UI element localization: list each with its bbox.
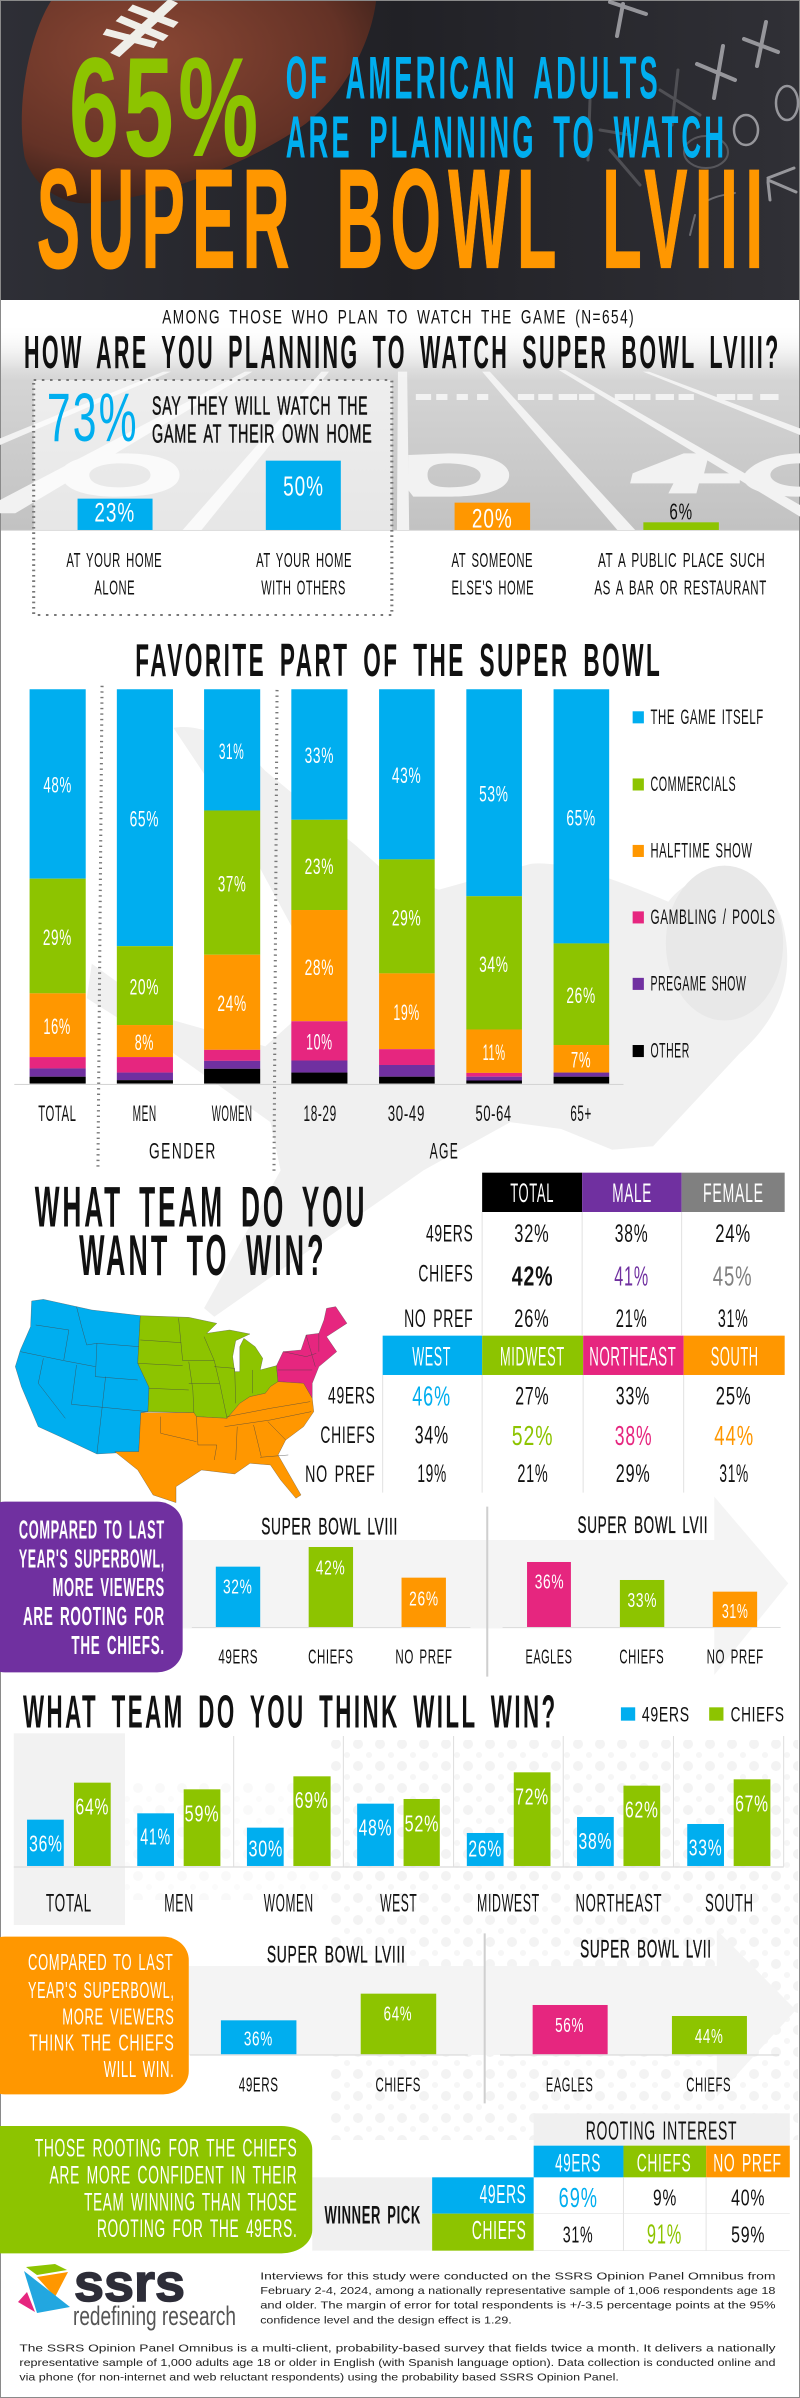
- field photo backdrop: [0, 323, 800, 531]
- table: regions: 34%: [415, 1420, 449, 1449]
- table: total male female: TOTAL: [510, 1179, 554, 1208]
- panel description text: [19, 2342, 776, 2383]
- chart: winner pick by group: 48%: [359, 1816, 392, 1841]
- section: rooting comparison: MORE VIEWERS: [53, 1574, 165, 1602]
- chart: winner pick by group: [14, 1772, 784, 1868]
- map: US regions: [15, 1299, 347, 1503]
- table: total male female: 41%: [614, 1260, 649, 1292]
- divider: [483, 1933, 487, 2103]
- table: total male female: 38%: [615, 1219, 648, 1247]
- logo: SSRS: ssrs: [74, 2254, 185, 2313]
- table: rooting interest vs winner pick: 49ERS: [555, 2148, 601, 2177]
- section: winner comparison: WILL WIN.: [104, 2057, 174, 2082]
- stacked bar: total: 16%: [43, 1014, 71, 1039]
- stacked bar: men: 8%: [135, 1030, 154, 1055]
- legend: [621, 1702, 785, 1726]
- table: regions: NO PREF: [305, 1460, 376, 1487]
- section: rooting versus winner pick: TEAM WINNING THAN THOSE: [84, 2187, 297, 2216]
- chart: winner pick by group: 30%: [248, 1837, 283, 1862]
- panel description text: via phone (for non-internet and web reluctant respondents) using the probability based SSRS Opinion Panel.: [19, 2371, 619, 2383]
- logo: SSRS: [18, 2254, 236, 2331]
- background: football player silhouette: [87, 727, 787, 1317]
- chart: winner pick by group: 69%: [295, 1788, 329, 1813]
- stacked bar: women: 24%: [217, 991, 247, 1016]
- table: regions: CHIEFS: [320, 1421, 376, 1448]
- section: how viewers plan to watch: WITH OTHERS: [261, 576, 346, 599]
- table: total male female: [404, 1173, 785, 1335]
- bar: at your home with others: 50%: [283, 470, 324, 502]
- chart: Super Bowl LVIII prediction: [190, 1941, 468, 2096]
- table: regions: 29%: [616, 1459, 651, 1487]
- chart: winner pick by group: 41%: [140, 1825, 171, 1850]
- stacked bar: age 18-29: 10%: [306, 1030, 333, 1054]
- stacked bar: women: 37%: [218, 872, 246, 896]
- chart: Super Bowl LVIII rooting: SUPER BOWL LVIII: [261, 1513, 398, 1540]
- section: rooting comparison: COMPARED TO LAST: [19, 1516, 165, 1545]
- stacked bar: women: [204, 689, 260, 1084]
- table: total male female: 49ERS: [426, 1220, 473, 1247]
- background dot texture lower left: [40, 1780, 340, 1900]
- table: regions: 33%: [616, 1381, 650, 1410]
- table: regions: 38%: [615, 1419, 653, 1451]
- bar category labels: TOTAL: [38, 1101, 77, 1126]
- table: total male female: 26%: [514, 1304, 549, 1332]
- stacked bar: men: [117, 689, 173, 1084]
- callout: more confident: [0, 2126, 312, 2253]
- total column shading: [14, 1733, 125, 1925]
- table: rooting interest vs winner pick: CHIEFS: [472, 2217, 527, 2245]
- section: rooting versus winner pick: [0, 2113, 790, 2383]
- bar category labels: WOMEN: [212, 1101, 253, 1126]
- section: how viewers plan to watch: [0, 306, 800, 615]
- section: favorite part of the Super Bowl: GENDER: [149, 1139, 217, 1163]
- table: total male female: 24%: [715, 1219, 751, 1247]
- section: how viewers plan to watch: AT SOMEONE: [452, 548, 533, 572]
- bar category labels: 30-49: [388, 1101, 425, 1126]
- stacked bar: age 18-29: 23%: [305, 854, 334, 879]
- table: regions: WEST: [412, 1342, 451, 1372]
- chart: Super Bowl LVII rooting: EAGLES: [526, 1645, 572, 1668]
- table: rooting interest vs winner pick: [312, 2113, 790, 2251]
- table: total male female: CHIEFS: [418, 1260, 473, 1287]
- bar: at someone else's home: 20%: [472, 504, 513, 533]
- table: total male female: 42%: [512, 1260, 554, 1292]
- chart category labels: [46, 1888, 754, 1917]
- stacked bar: age 65+: 26%: [566, 983, 596, 1008]
- chart category labels: MEN: [164, 1888, 194, 1917]
- chart: Super Bowl LVIII rooting: 49ERS: [218, 1645, 258, 1668]
- table: regions: 25%: [716, 1381, 752, 1410]
- stacked bar: age 50-64: 34%: [479, 952, 509, 977]
- table: total male female: 31%: [718, 1304, 748, 1332]
- chart: Super Bowl LVII prediction: [500, 1935, 779, 2096]
- chart: Super Bowl LVII prediction: 44%: [695, 2026, 723, 2048]
- stacked bar: total: [30, 689, 86, 1084]
- section: favorite part of the Super Bowl: [14, 635, 776, 1172]
- section: rooting versus winner pick: THOSE ROOTING FOR THE CHIEFS: [35, 2133, 297, 2162]
- bar: at your home alone: 23%: [94, 498, 135, 528]
- chart: Super Bowl LVII rooting: CHIEFS: [619, 1645, 664, 1668]
- header banner: 65%: [69, 28, 263, 186]
- header banner: [1, 1, 799, 300]
- chart axis and group dividers: [14, 686, 623, 1172]
- section: rooting comparison: NO PREF: [395, 1645, 453, 1668]
- table: rooting interest vs winner pick: 9%: [653, 2186, 677, 2211]
- bar: at a public place: [594, 500, 767, 599]
- heading: [35, 1175, 367, 1287]
- stacked bar: age 50-64: [466, 689, 522, 1084]
- bar category labels: [38, 1101, 592, 1126]
- stacked bar: men: 65%: [130, 807, 159, 831]
- background arrow: [189, 1930, 796, 2097]
- chart: Super Bowl LVIII rooting: CHIEFS: [308, 1645, 354, 1668]
- methodology text: confidence level and the design effect is 1.29.: [260, 2314, 512, 2326]
- callout: 73% at own home: 73%: [47, 379, 139, 456]
- bar: at someone else's home: [452, 503, 534, 599]
- background arrow: [183, 1497, 788, 1675]
- chart: Super Bowl LVII rooting: 31%: [722, 1601, 748, 1623]
- chart: Super Bowl LVIII rooting: [192, 1513, 470, 1668]
- chart category labels: MIDWEST: [477, 1888, 540, 1917]
- chart: Super Bowl LVIII prediction: 49ERS: [239, 2073, 279, 2096]
- section: rooting comparison: [0, 1497, 788, 1677]
- chart: Super Bowl LVIII prediction: SUPER BOWL LVIII: [267, 1941, 406, 1968]
- chart: Super Bowl LVIII rooting: 42%: [316, 1558, 345, 1579]
- table: regions: 19%: [417, 1459, 447, 1487]
- chart: Super Bowl LVII rooting: 33%: [628, 1590, 657, 1612]
- table: regions: 52%: [512, 1419, 554, 1451]
- section: winner comparison: YEAR'S SUPERBOWL,: [28, 1978, 174, 2003]
- table: total male female: 21%: [616, 1304, 647, 1332]
- section: how viewers plan to watch: AT YOUR HOME: [66, 548, 162, 572]
- stacked bar: age 30-49: 43%: [392, 763, 421, 788]
- table: rooting interest vs winner pick: 69%: [559, 2183, 598, 2213]
- table: rooting interest vs winner pick: 31%: [563, 2222, 593, 2248]
- table: regions: 46%: [412, 1380, 451, 1412]
- stacked bar: age 30-49: 29%: [392, 906, 421, 930]
- stacked bar: age 65+: 7%: [571, 1048, 591, 1072]
- chart category labels: WEST: [380, 1888, 417, 1917]
- section: winner comparison: [0, 1930, 796, 2103]
- section: how viewers plan to watch: AT YOUR HOME: [256, 548, 352, 572]
- chart: Super Bowl LVII rooting: [503, 1511, 781, 1668]
- chart: winner pick by group: 36%: [29, 1831, 63, 1857]
- table: rooting interest vs winner pick: 91%: [647, 2220, 682, 2250]
- table: regions: 49ERS: [328, 1382, 376, 1409]
- section: winner comparison: COMPARED TO LAST: [28, 1950, 173, 1975]
- callout: 73% at own home: [34, 379, 392, 615]
- section: rooting versus winner pick: ARE MORE CONFIDENT IN THEIR: [49, 2160, 297, 2189]
- chart: winner pick by group: 33%: [689, 1836, 722, 1861]
- bar: at a public place: 6%: [669, 500, 693, 525]
- stacked bar: men: 20%: [130, 975, 159, 999]
- bar category labels: 18-29: [304, 1101, 337, 1126]
- callout: think the Chiefs will win: [0, 1937, 189, 2094]
- section: rooting comparison: ARE ROOTING FOR: [23, 1603, 165, 1631]
- table: regions: 21%: [517, 1459, 548, 1487]
- stacked bar: women: 31%: [219, 739, 244, 764]
- chart: Super Bowl LVIII prediction: 36%: [244, 2028, 273, 2050]
- chart: Super Bowl LVII prediction: EAGLES: [546, 2073, 593, 2096]
- icon: football: [22, 1, 376, 203]
- stacked bar: age 18-29: [291, 689, 347, 1084]
- stacked bar: age 18-29: 28%: [305, 955, 334, 980]
- stacked bar: total: 29%: [43, 925, 72, 950]
- table: regions: 27%: [515, 1381, 549, 1410]
- stacked bar: age 30-49: [379, 689, 435, 1084]
- table: total male female: NO PREF: [404, 1304, 473, 1332]
- stacked bar: age 65+: [554, 689, 609, 1084]
- bar category labels: 50-64: [476, 1101, 512, 1126]
- table: regions: [305, 1336, 785, 1493]
- section: what team do you think will win: [14, 1685, 785, 1925]
- chart: Super Bowl LVII prediction: 56%: [555, 2015, 584, 2037]
- legend: OTHER: [651, 1038, 690, 1062]
- background dot texture: [330, 1740, 798, 2140]
- section: rooting versus winner pick: ROOTING FOR THE 49ERS.: [97, 2214, 297, 2242]
- chart: Super Bowl LVIII rooting: 32%: [223, 1577, 253, 1598]
- logo: SSRS: redefining research: [73, 2301, 236, 2331]
- chart: Super Bowl LVII rooting: 36%: [535, 1572, 564, 1593]
- chart: winner pick by group: 59%: [185, 1801, 219, 1827]
- stacked bar: age 50-64: 53%: [479, 782, 509, 806]
- section: rooting comparison: YEAR'S SUPERBOWL,: [19, 1545, 165, 1574]
- chart: Super Bowl LVIII prediction: 64%: [384, 2003, 412, 2025]
- bar: at your home alone: [66, 498, 162, 599]
- table: rooting interest vs winner pick: 49ERS: [480, 2181, 527, 2209]
- chart: winner pick by group: 62%: [625, 1797, 659, 1823]
- section: winner comparison: THINK THE CHIEFS: [29, 2030, 174, 2056]
- chart: winner pick by group: 52%: [405, 1811, 439, 1837]
- bar category labels: MEN: [133, 1101, 157, 1126]
- gridlines: [234, 1736, 784, 1867]
- divider: [485, 1507, 489, 1677]
- section: favorite part of the Super Bowl: AGE: [430, 1139, 459, 1163]
- section: what team do you want to win: [15, 1173, 785, 1503]
- table: rooting interest vs winner pick: CHIEFS: [637, 2148, 691, 2177]
- chart: winner pick by group: 64%: [76, 1795, 109, 1820]
- stacked bar: age 50-64: 11%: [483, 1040, 506, 1065]
- icon: chalk play diagram: [588, 2, 798, 235]
- legend: [633, 705, 776, 1062]
- table: rooting interest vs winner pick: WINNER PICK: [324, 2201, 421, 2229]
- chart: winner pick by group: 26%: [468, 1837, 502, 1862]
- section: how viewers plan to watch: ELSE'S HOME: [452, 576, 534, 599]
- chart: winner pick by group: 72%: [515, 1785, 549, 1810]
- stacked bar: age 18-29: 33%: [305, 743, 334, 768]
- table: regions: MIDWEST: [500, 1342, 565, 1372]
- bar: at your home alone: ALONE: [94, 576, 135, 599]
- methodology text: [260, 2270, 776, 2326]
- section: how viewers plan to watch: SAY THEY WILL WATCH THE: [152, 392, 368, 421]
- legend: 49ERS: [642, 1702, 690, 1726]
- bar: at your home with others: [256, 461, 352, 599]
- stacked bar: age 65+: 65%: [566, 806, 596, 830]
- callout: rooting for the Chiefs: [0, 1502, 183, 1672]
- section: favorite part of the Super Bowl: 65+: [570, 1101, 592, 1126]
- stacked bar: age 30-49: 19%: [393, 1000, 420, 1025]
- stacked bar: total: 48%: [43, 773, 72, 797]
- chart category labels: TOTAL: [46, 1888, 92, 1917]
- section: how viewers plan to watch: GAME AT THEIR OWN HOME: [152, 420, 372, 449]
- chart category labels: WOMEN: [264, 1888, 314, 1917]
- chart: Super Bowl LVIII prediction: CHIEFS: [376, 2073, 421, 2096]
- section: rooting comparison: THE CHIEFS.: [71, 1632, 165, 1660]
- chart: winner pick by group: 38%: [579, 1829, 612, 1854]
- table: total male female: 32%: [514, 1219, 549, 1247]
- table: total male female: MALE: [612, 1179, 652, 1208]
- section: winner comparison: MORE VIEWERS: [62, 2005, 174, 2030]
- chart: Super Bowl LVIII rooting: 26%: [409, 1588, 439, 1610]
